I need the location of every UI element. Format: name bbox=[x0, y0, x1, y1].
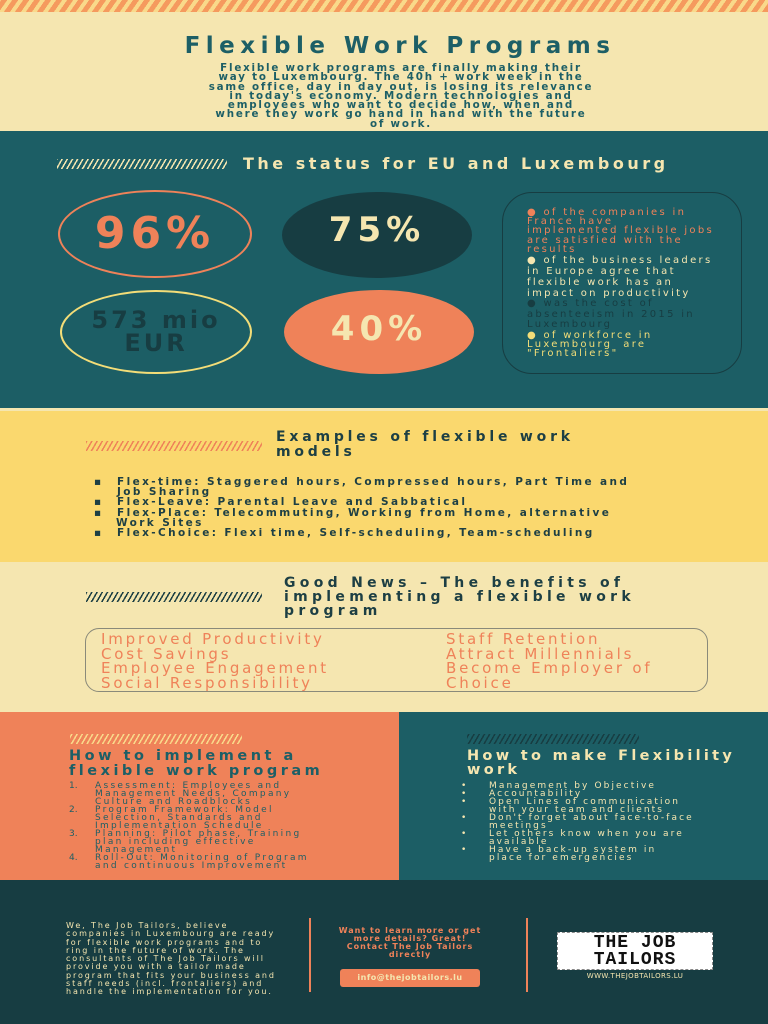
email button: info@thejobtailors.lu bbox=[357, 973, 463, 982]
intro text bbox=[209, 62, 593, 130]
contact block bbox=[339, 926, 481, 987]
footer text: We, The Job Tailors, believe bbox=[66, 921, 228, 930]
list: tips: Let others know when you are bbox=[489, 829, 684, 839]
list: steps: Management Needs, Company bbox=[95, 789, 291, 799]
list: tips: • bbox=[461, 829, 466, 839]
legend box: absenteeism in 2015 in bbox=[527, 309, 695, 320]
title: Flexible Work Programs bbox=[185, 33, 615, 59]
legend box: France have bbox=[527, 216, 613, 227]
footer text: ring in the future of work. The bbox=[66, 946, 245, 955]
list: tips: • bbox=[461, 845, 466, 855]
logo: WWW.THEJOBTAILORS.LU bbox=[587, 972, 683, 980]
list: steps: 1. bbox=[69, 781, 78, 791]
benefits box: Staff Retention bbox=[446, 630, 600, 648]
stat 40%: 40% bbox=[331, 309, 427, 349]
contact block: Contact The Job Tailors bbox=[347, 942, 473, 951]
heading: examples: Examples of flexible work bbox=[276, 429, 574, 445]
list: tips: Accountability bbox=[489, 789, 582, 799]
contact block: Want to learn more or get bbox=[339, 926, 481, 935]
list: steps: Program Framework: Model bbox=[95, 805, 274, 815]
list: tips: Have a back-up system in bbox=[489, 845, 656, 855]
stat 96%: 96% bbox=[95, 208, 215, 259]
heading: implement: How to implement a bbox=[69, 748, 297, 764]
list: models: ▪ bbox=[94, 527, 101, 539]
list: steps: Culture and Roadblocks bbox=[95, 797, 252, 807]
legend box: ● of the companies in bbox=[527, 207, 686, 218]
list: steps: Selection, Standards and bbox=[95, 813, 263, 823]
stat 573 mio EUR bbox=[60, 290, 252, 374]
intro text: Flexible work programs are finally making their bbox=[220, 62, 582, 74]
heading: benefits: program bbox=[284, 603, 382, 619]
legend box: ● was the cost of bbox=[527, 298, 654, 309]
legend box: ● of workforce in bbox=[527, 330, 652, 341]
list: models: Work Sites bbox=[116, 517, 204, 529]
list: tips: Open Lines of communication bbox=[489, 797, 680, 807]
panel: examples bbox=[0, 408, 768, 562]
list: tips: • bbox=[461, 789, 466, 799]
heading: examples bbox=[276, 429, 574, 460]
list: models: Flex-Place: Telecommuting, Working from Home, alternative bbox=[117, 507, 611, 519]
list: steps: and continuous Improvement bbox=[95, 861, 288, 871]
stat 40% bbox=[284, 290, 474, 374]
list: steps bbox=[69, 781, 309, 871]
footer text: consultants of The Job Tailors will bbox=[66, 954, 265, 963]
legend box: are satisfied with the bbox=[527, 235, 683, 246]
benefits box: Attract Millennials bbox=[446, 644, 634, 662]
contact block: more details? Great! bbox=[354, 934, 466, 943]
heading: flexibility bbox=[467, 748, 735, 778]
header panel bbox=[0, 12, 768, 131]
list: models: ▪ bbox=[94, 476, 101, 488]
benefits box: Employee Engagement bbox=[101, 659, 329, 677]
panel: how to implement bbox=[0, 712, 399, 880]
legend box: in Europe agree that bbox=[527, 266, 676, 277]
list: tips: Management by Objective bbox=[489, 781, 656, 791]
legend box bbox=[502, 192, 742, 374]
list: tips: • bbox=[461, 797, 466, 807]
footer text: program that fits your business and bbox=[66, 971, 276, 980]
heading: examples: models bbox=[276, 444, 356, 460]
list: models: ▪ bbox=[94, 507, 101, 519]
stat 75%: 75% bbox=[329, 210, 425, 250]
list: steps: 2. bbox=[69, 805, 78, 815]
heading: benefits: implementing a flexible work bbox=[284, 589, 635, 605]
footer text bbox=[66, 921, 276, 996]
intro text: of work. bbox=[370, 118, 432, 130]
legend box: impact on productivity bbox=[527, 288, 691, 299]
list: tips: • bbox=[461, 781, 466, 791]
list: tips: • bbox=[461, 813, 466, 823]
list: models: Job Sharing bbox=[117, 486, 212, 498]
footer text: staff needs (incl. frontaliers) and bbox=[66, 979, 263, 988]
intro text: employees who want to decide how, when and bbox=[228, 99, 574, 111]
stat 573 mio EUR: EUR bbox=[124, 329, 188, 357]
list: models: Flex-Leave: Parental Leave and Sabbatical bbox=[117, 496, 467, 508]
panel: make flexibility work bbox=[399, 712, 768, 880]
top stripe band bbox=[0, 0, 768, 12]
list: steps: 3. bbox=[69, 829, 78, 839]
list: tips: available bbox=[489, 837, 549, 847]
legend box: Luxembourg are bbox=[527, 339, 646, 350]
heading: flexibility: work bbox=[467, 762, 520, 778]
stat 96% bbox=[58, 190, 252, 278]
benefits box: Improved Productivity bbox=[101, 630, 325, 648]
list: steps: Implementation Schedule bbox=[95, 821, 264, 831]
logo: THE JOB bbox=[594, 933, 676, 953]
intro text: in today's economy. Modern technologies and bbox=[229, 90, 573, 102]
list: steps: Management bbox=[95, 845, 177, 855]
list: steps: plan including effective bbox=[95, 837, 256, 847]
list: models: Flex-Choice: Flexi time, Self-scheduling, Team-scheduling bbox=[117, 527, 595, 539]
list: tips: with your team and clients bbox=[489, 805, 664, 815]
list: models bbox=[94, 476, 629, 539]
footer text: provide you with a tailor made bbox=[66, 962, 246, 971]
list: models: ▪ bbox=[94, 496, 101, 508]
benefits box: Social Responsibility bbox=[101, 674, 313, 692]
list: steps: Roll-Out: Monitoring of Program bbox=[95, 853, 309, 863]
list: steps: Assessment: Employees and bbox=[95, 781, 281, 791]
list: tips bbox=[461, 781, 694, 863]
footer text: for flexible work programs and to bbox=[66, 938, 262, 947]
legend box: results bbox=[527, 244, 577, 255]
list: steps: Planning: Pilot phase, Training bbox=[95, 829, 301, 839]
email button bbox=[340, 969, 480, 987]
legend box: flexible work has an bbox=[527, 277, 673, 288]
benefits box: Choice bbox=[446, 674, 514, 692]
logo bbox=[557, 932, 713, 980]
list: tips: meetings bbox=[489, 821, 548, 831]
heading: benefits bbox=[284, 575, 635, 619]
footer text: handle the implementation for you. bbox=[66, 987, 273, 996]
stat 573 mio EUR: 573 mio bbox=[91, 306, 221, 334]
benefits box: Become Employer of bbox=[446, 659, 652, 677]
benefits box bbox=[85, 628, 708, 692]
list: tips: place for emergencies bbox=[489, 853, 633, 863]
benefits box: Cost Savings bbox=[101, 644, 231, 662]
list: steps: 4. bbox=[69, 853, 78, 863]
list: models: Flex-time: Staggered hours, Compressed hours, Part Time and bbox=[117, 476, 629, 488]
logo: TAILORS bbox=[594, 950, 676, 970]
heading: implement: flexible work program bbox=[69, 763, 323, 779]
footer text: companies in Luxembourg are ready bbox=[66, 929, 275, 938]
list: tips: Don't forget about face-to-face bbox=[489, 813, 694, 823]
heading: benefits: Good News – The benefits of bbox=[284, 575, 624, 591]
legend box: ● of the business leaders bbox=[527, 255, 712, 266]
intro text: where they work go hand in hand with the future bbox=[215, 108, 587, 120]
intro text: way to Luxembourg. The 40h + work week in the bbox=[218, 71, 584, 83]
panel: status EU and Luxembourg bbox=[0, 131, 768, 408]
contact block: directly bbox=[389, 950, 431, 959]
heading: status: The status for EU and Luxembourg bbox=[243, 154, 669, 173]
heading: implement bbox=[69, 748, 323, 779]
legend box: Luxembourg bbox=[527, 319, 612, 330]
legend box: "Frontaliers" bbox=[527, 348, 619, 359]
legend box: implemented flexible jobs bbox=[527, 225, 714, 236]
footer bbox=[0, 880, 768, 1024]
panel: benefits bbox=[0, 562, 768, 712]
stat 75% bbox=[282, 192, 472, 278]
intro text: same office, day in day out, is losing its relevance bbox=[209, 81, 593, 93]
heading: flexibility: How to make Flexibility bbox=[467, 748, 735, 764]
